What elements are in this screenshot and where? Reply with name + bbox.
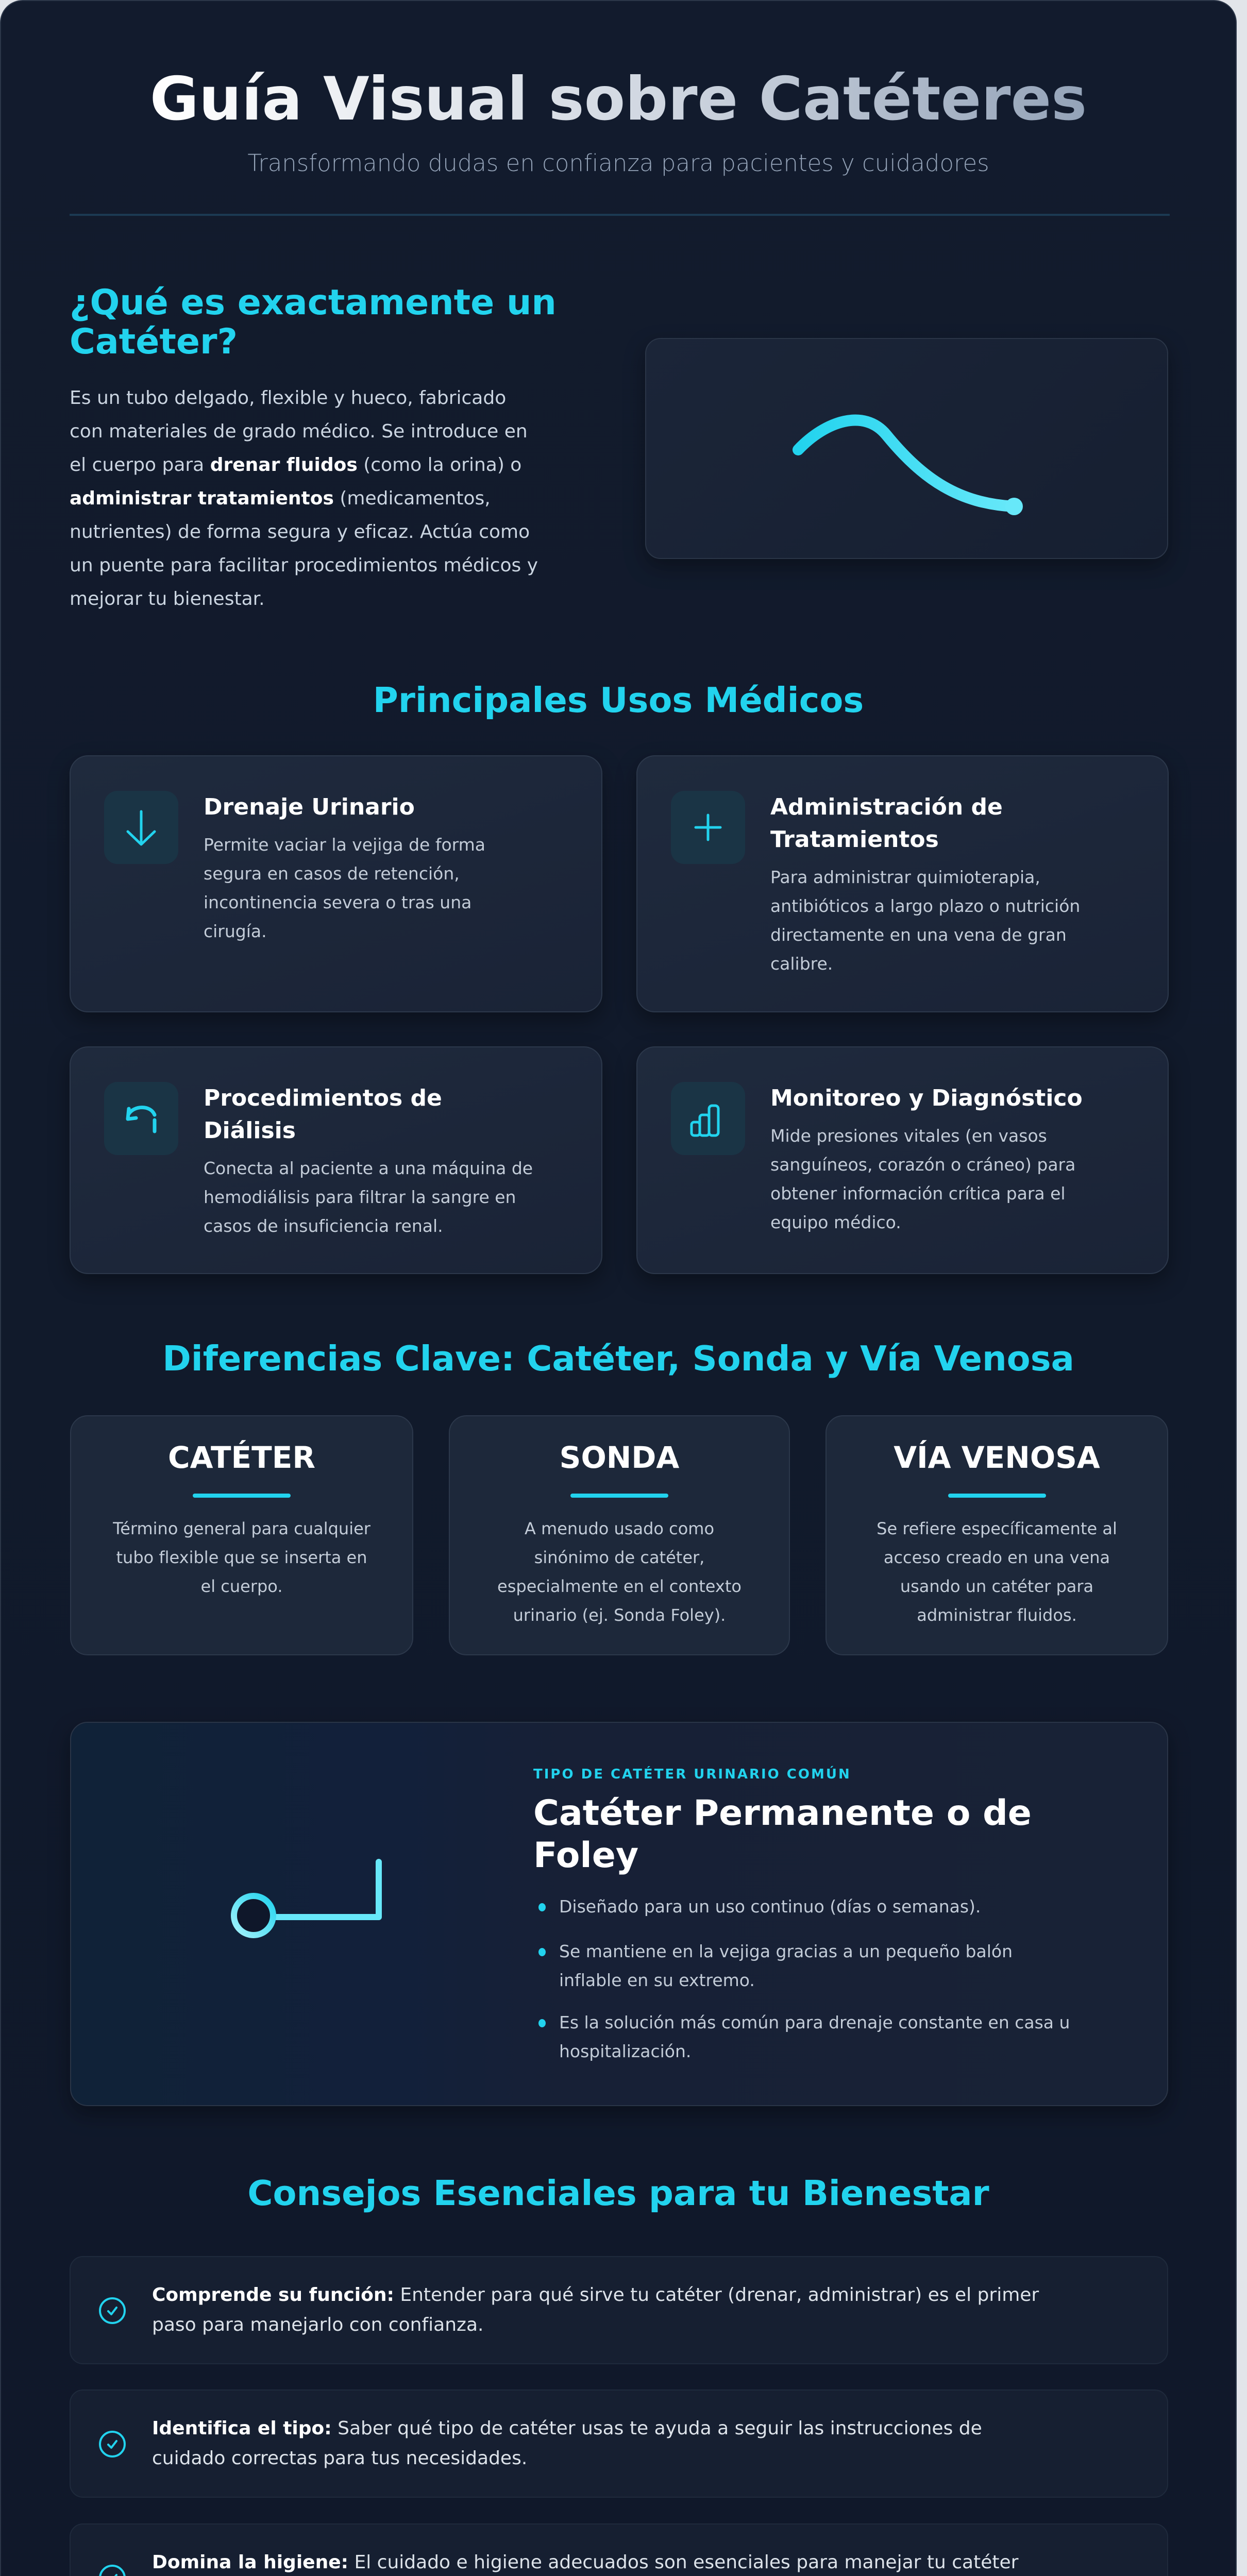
icon: dialysis loop [104,1082,178,1155]
text block: definition: nutrientes) de forma segura y eficaz. Actúa como [70,521,530,543]
panel: vía venosa definition [825,1415,1168,1655]
panel: foley catheter [70,1722,1168,2106]
panel: catéter definition: el cuerpo. [201,1577,282,1596]
panel: catéter definition: Término general para cualquier [113,1519,370,1538]
tip: identifica [70,2389,1168,2498]
list: foley features: hospitalización. [559,2041,691,2061]
title: foley: Foley [533,1835,638,1876]
panel: administración de tratamientos [636,755,1169,1012]
tip: comprende: paso para manejarlo con confianza. [152,2314,483,2335]
text: diálisis: hemodiálisis para filtrar la sangre en [204,1187,516,1207]
title: foley [533,1793,1032,1876]
panel: sonda definition: especialmente en el contexto [497,1577,742,1596]
panel: sonda definition: A menudo usado como [525,1519,714,1538]
subtitle: Transformando dudas en confianza para pacientes y cuidadores [247,149,989,177]
title: foley: Catéter Permanente o de [533,1793,1032,1834]
heading: diferencias clave: Diferencias Clave: Catéter, Sonda y Vía Venosa [162,1338,1074,1379]
panel: vía venosa definition: usando un catéter para [900,1577,1093,1596]
text: administración: Para administrar quimioterapia, [770,867,1040,887]
text: drenaje: Drenaje Urinario [204,794,415,820]
heading: principales usos: Principales Usos Médicos [373,680,864,720]
text block: definition: administrar tratamientos (medicamentos, [70,488,491,509]
text block: definition: con materiales de grado médico. Se introduce en [70,421,528,442]
text block: definition: el cuerpo para drenar fluidos (como la orina) o [70,454,521,476]
tip: higiene [70,2523,1168,2576]
text: monitoreo: Mide presiones vitales (en vasos [770,1126,1047,1146]
text: administración: Administración de [770,794,1003,820]
heading: qué es un catéter: ¿Qué es exactamente un [70,282,557,323]
panel: sonda definition: urinario (ej. Sonda Foley). [513,1605,726,1625]
panel: catéter definition: CATÉTER [168,1440,315,1475]
icon: arrow down [104,791,178,864]
panel: vía venosa definition: administrar fluidos. [917,1605,1077,1625]
panel: monitoreo [636,1046,1169,1274]
text: administración: directamente en una vena de gran [770,925,1067,945]
text: drenaje: Permite vaciar la vejiga de forma [204,835,485,855]
label: tipo: TIPO DE CATÉTER URINARIO COMÚN [533,1767,851,1782]
panel: vía venosa definition: Se refiere específicamente al [877,1519,1117,1538]
panel: catéter definition: tubo flexible que se inserta en [116,1548,367,1567]
tip: comprende: Comprende su función: Entender para qué sirve tu catéter (drenar, administrar) es el primer [152,2284,1039,2306]
text: diálisis: casos de insuficiencia renal. [204,1216,443,1236]
list: foley features: Es la solución más común para drenaje constante en casa u [559,2012,1070,2032]
list: foley features: Se mantiene en la vejiga gracias a un pequeño balón [559,1941,1013,1961]
text: monitoreo: equipo médico. [770,1212,901,1232]
panel: drenaje urinario [70,755,602,1012]
text: monitoreo: Monitoreo y Diagnóstico [770,1085,1083,1111]
tip: higiene: Domina la higiene: El cuidado e higiene adecuados son esenciales para manejar tu catéter [152,2552,1018,2573]
text block: definition [70,387,538,609]
text: administración: calibre. [770,954,833,974]
list: foley features: Diseñado para un uso continuo (días o semanas). [559,1896,981,1917]
icon: foley catheter [231,1859,382,1938]
panel: diálisis [70,1046,602,1274]
panel: sonda definition: sinónimo de catéter, [534,1548,704,1567]
heading: qué es un catéter [70,282,557,362]
illustration: catheter curve [645,338,1168,559]
panel: catéter definition [70,1415,413,1655]
text: monitoreo [770,1085,1083,1232]
text: monitoreo: obtener información crítica para el [770,1183,1066,1204]
panel: sonda definition: SONDA [560,1440,679,1475]
text: administración: antibióticos a largo plazo o nutrición [770,896,1080,916]
text block: definition: Es un tubo delgado, flexible y hueco, fabricado [70,387,506,409]
list: foley features: inflable en su extremo. [559,1970,755,1990]
panel: sonda definition [449,1415,790,1655]
text: drenaje: segura en casos de retención, [204,863,460,884]
text: administración: Tratamientos [770,826,939,853]
text block: definition: mejorar tu bienestar. [70,588,265,609]
tip: identifica: Identifica el tipo: Saber qué tipo de catéter usas te ayuda a seguir las instrucciones de [152,2418,982,2439]
text: diálisis: Conecta al paciente a una máquina de [204,1158,533,1178]
heading: qué es un catéter: Catéter? [70,321,238,362]
text: administración [770,794,1080,974]
tip: identifica: cuidado correctas para tus necesidades. [152,2448,527,2469]
list: foley features [538,1896,1070,2061]
text: diálisis: Diálisis [204,1117,296,1144]
tip: comprende [70,2256,1168,2364]
icon: plus [671,791,745,864]
title: Guía Visual sobre Catéteres [150,64,1087,134]
heading: consejos: Consejos Esenciales para tu Bienestar [247,2173,989,2213]
text: diálisis [204,1085,533,1236]
text: monitoreo: sanguíneos, corazón o cráneo) para [770,1155,1075,1175]
text: drenaje: incontinencia severa o tras una [204,892,471,912]
icon: bar chart [671,1082,745,1155]
text block: definition: un puente para facilitar procedimientos médicos y [70,555,538,576]
text: diálisis: Procedimientos de [204,1085,442,1111]
panel: vía venosa definition: VÍA VENOSA [894,1440,1100,1475]
text: drenaje: cirugía. [204,921,267,941]
text: drenaje [204,794,485,941]
panel: vía venosa definition: acceso creado en una vena [884,1548,1110,1567]
